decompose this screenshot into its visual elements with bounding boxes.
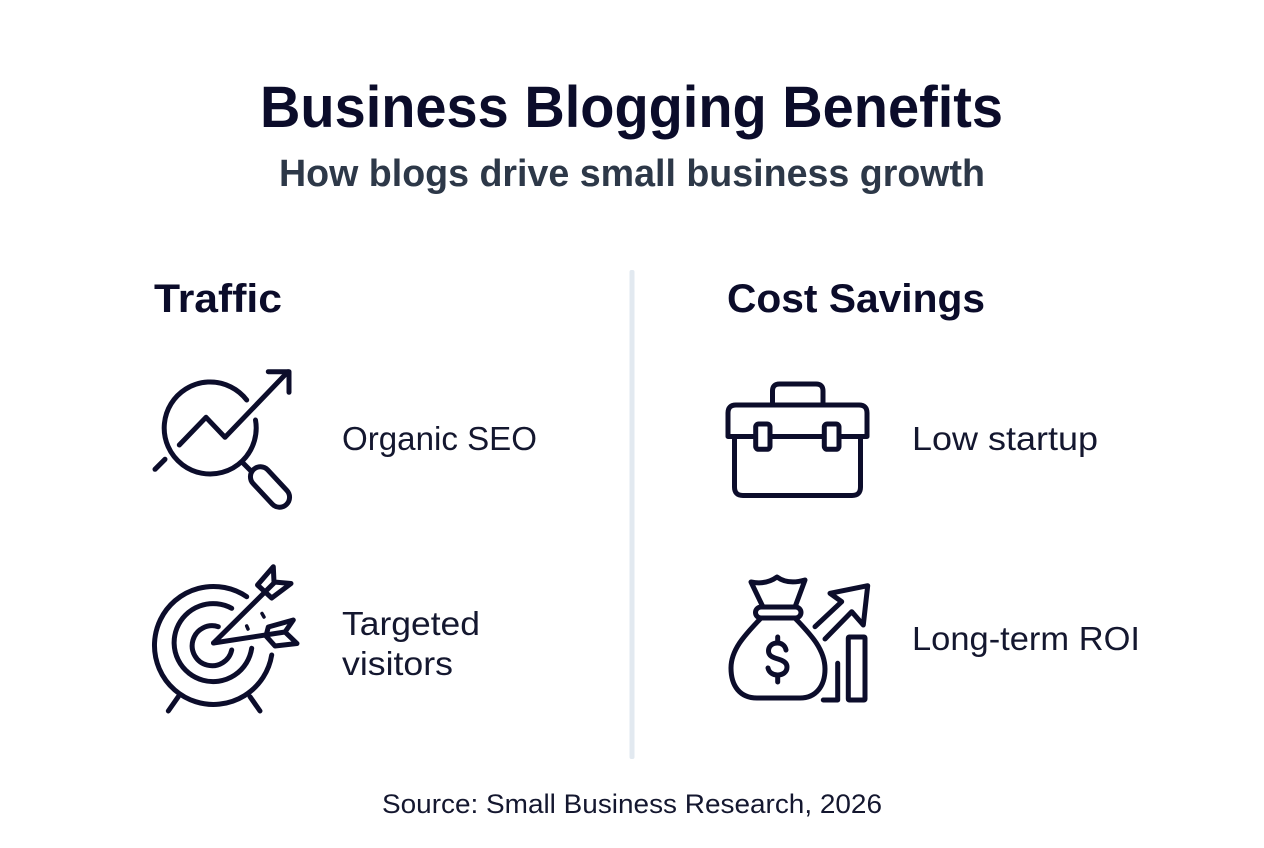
icon: money bag with growth [731,577,868,700]
label: targeted visitors: Targeted [342,605,480,642]
title: Business Blogging Benefits [260,75,1003,140]
source note: Source: Small Business Research, 2026 [382,789,882,819]
heading: traffic: Traffic [154,277,282,321]
icon: target with arrows [154,567,297,711]
label: targeted visitors [342,605,480,682]
subtitle: How blogs drive small business growth [279,153,985,195]
label: targeted visitors: visitors [342,645,453,682]
divider [630,270,634,759]
heading: cost savings: Cost Savings [727,277,985,321]
panel: cost savings [727,277,1140,700]
panel: traffic [154,277,537,711]
icon: toolbox [728,384,867,496]
icon: magnifier with growth arrow [155,372,294,511]
label: long-term roi: Long-term ROI [912,620,1140,657]
label: organic seo: Organic SEO [342,420,537,457]
label: low startup: Low startup [912,420,1098,457]
